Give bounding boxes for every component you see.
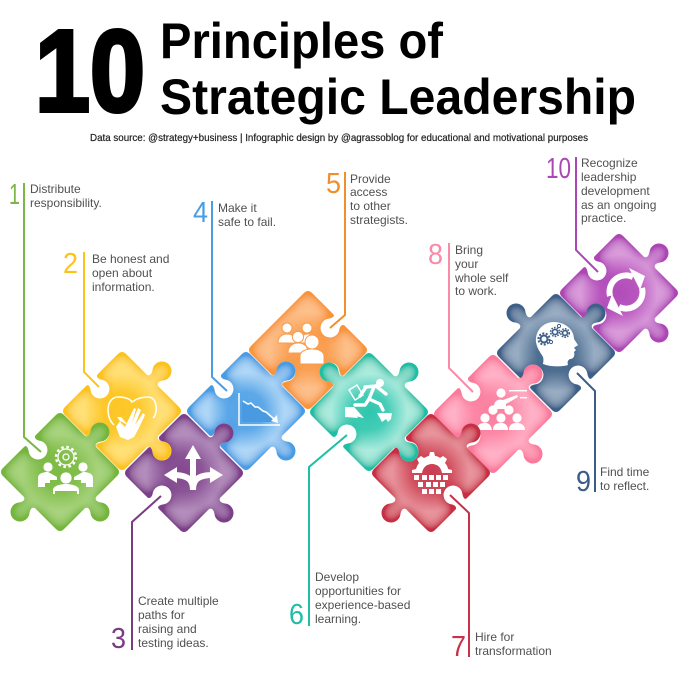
number 10: 10 bbox=[546, 153, 571, 185]
text 1: Distribute bbox=[30, 182, 81, 196]
icon: team meeting with gear bbox=[38, 447, 93, 494]
piece 8: pink bbox=[434, 355, 552, 473]
data source line: Data source: @strategy+business | Infographic design by @agrassoblog for educational and motivational purposes bbox=[90, 132, 588, 144]
text 10: practice. bbox=[581, 211, 626, 225]
icon: three-way arrows bbox=[164, 445, 223, 490]
number 3: 3 bbox=[111, 623, 126, 655]
text 10: leadership bbox=[581, 170, 637, 184]
text 8: your bbox=[455, 257, 478, 271]
text 9: Find time bbox=[600, 465, 650, 479]
callout 4 bbox=[193, 197, 276, 391]
callout 9 bbox=[576, 373, 650, 498]
text 2: open about bbox=[92, 266, 153, 280]
text 6: Develop bbox=[315, 570, 359, 584]
text 10: development bbox=[581, 184, 650, 198]
text 4: Make it bbox=[218, 201, 257, 215]
text 5: to other bbox=[350, 199, 391, 213]
number 2: 2 bbox=[63, 248, 78, 280]
text 10: as an ongoing bbox=[581, 198, 656, 212]
piece 10: violet bbox=[560, 234, 678, 352]
number 5: 5 bbox=[326, 168, 341, 200]
number 6: 6 bbox=[289, 599, 304, 631]
puzzle chain bbox=[1, 234, 678, 532]
text 6: learning. bbox=[315, 612, 361, 626]
text 8: to work. bbox=[455, 284, 497, 298]
leader line 10 bbox=[576, 157, 598, 272]
number 8: 8 bbox=[428, 239, 443, 271]
text 10: Recognize bbox=[581, 156, 638, 170]
piece 6: teal bbox=[310, 353, 428, 471]
text 1: responsibility. bbox=[30, 196, 102, 210]
piece 3: purple bbox=[125, 414, 243, 532]
text 9: to reflect. bbox=[600, 479, 649, 493]
callout 8 bbox=[428, 239, 509, 392]
number 7: 7 bbox=[451, 631, 466, 663]
piece 4: blue bbox=[187, 352, 305, 470]
icon: circular arrows bbox=[607, 268, 645, 316]
callout 1 bbox=[9, 179, 102, 452]
piece 1: green bbox=[1, 413, 119, 531]
text 7: transformation bbox=[475, 644, 552, 658]
number 1: 1 bbox=[9, 179, 20, 211]
leader line 5 bbox=[330, 172, 345, 328]
leader line 3 bbox=[132, 496, 161, 650]
text 3: raising and bbox=[138, 622, 197, 636]
large number 10: 10 bbox=[35, 6, 145, 136]
callout 7 bbox=[450, 495, 552, 663]
number 4: 4 bbox=[193, 197, 208, 229]
piece 7: red bbox=[372, 414, 490, 532]
callout 10 bbox=[546, 153, 656, 272]
text 8: Bring bbox=[455, 243, 483, 257]
leader line 8 bbox=[449, 243, 473, 392]
leader line 6 bbox=[309, 435, 347, 626]
text 3: paths for bbox=[138, 608, 185, 622]
leader line 4 bbox=[212, 201, 227, 391]
text 5: Provide bbox=[350, 172, 391, 186]
text 2: information. bbox=[92, 280, 155, 294]
text 3: testing ideas. bbox=[138, 636, 209, 650]
icon: group of people bbox=[278, 323, 324, 364]
text 7: Hire for bbox=[475, 630, 514, 644]
callout 2 bbox=[63, 248, 169, 387]
icon: presenter and audience bbox=[477, 388, 527, 430]
callout 5 bbox=[326, 168, 408, 328]
text 2: Be honest and bbox=[92, 252, 169, 266]
piece 9: navy bbox=[497, 294, 615, 412]
icon: heart and hand bbox=[108, 397, 156, 440]
text 6: experience-based bbox=[315, 598, 410, 612]
title line 2: Strategic Leadership bbox=[160, 69, 636, 125]
text 6: opportunities for bbox=[315, 584, 401, 598]
icon: gear with grid bbox=[412, 452, 452, 494]
text 5: strategists. bbox=[350, 213, 408, 227]
leader line 1 bbox=[24, 183, 41, 452]
text 3: Create multiple bbox=[138, 594, 219, 608]
piece 5: orange bbox=[249, 291, 367, 409]
icon: head with gears bbox=[536, 322, 578, 366]
title line 1: Principles of bbox=[160, 13, 443, 69]
leader line 7 bbox=[450, 495, 469, 657]
icon: runner with briefcase bbox=[345, 379, 392, 422]
piece 2: yellow bbox=[63, 352, 181, 470]
leader line 2 bbox=[84, 252, 99, 387]
icon: falling chart bbox=[239, 393, 280, 425]
text 4: safe to fail. bbox=[218, 215, 276, 229]
callout 3 bbox=[111, 496, 219, 655]
text 8: whole self bbox=[454, 271, 509, 285]
text 5: access bbox=[350, 185, 387, 199]
number 9: 9 bbox=[576, 466, 591, 498]
title bbox=[35, 6, 636, 136]
callout 6 bbox=[289, 435, 410, 631]
leader line 9 bbox=[577, 373, 595, 492]
